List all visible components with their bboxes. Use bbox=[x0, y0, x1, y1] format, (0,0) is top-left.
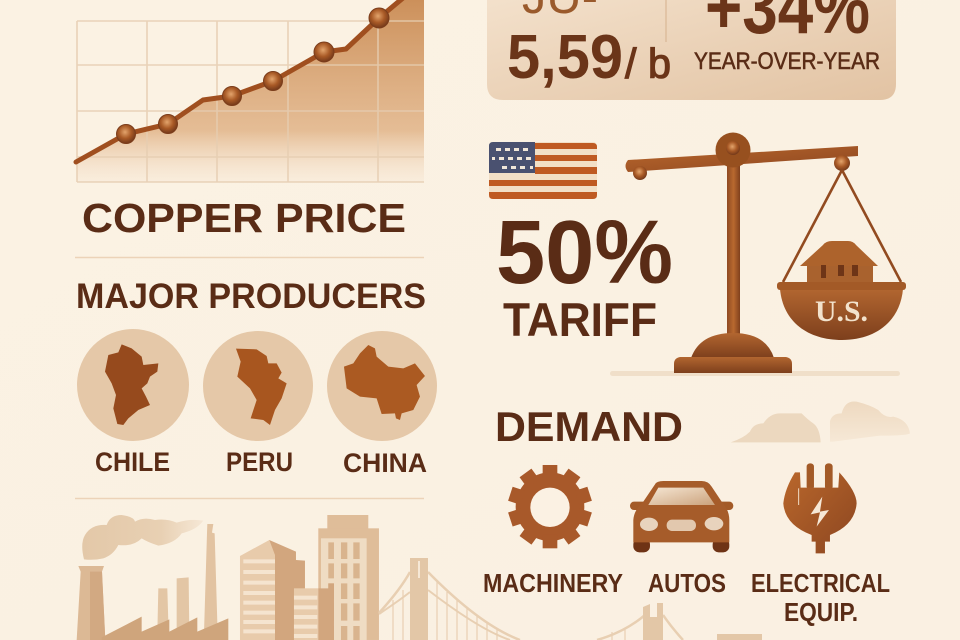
label: U.S.: U.S. bbox=[815, 295, 868, 328]
price unit: / b bbox=[625, 40, 671, 87]
label: China: CHINA bbox=[343, 448, 427, 478]
price value: 5,59 bbox=[507, 23, 623, 92]
distant building bbox=[717, 634, 762, 640]
icon: car bbox=[630, 481, 733, 552]
price line bbox=[76, 0, 403, 162]
beam bbox=[626, 146, 858, 172]
price panel bbox=[487, 0, 896, 100]
producer: Peru bbox=[203, 331, 313, 477]
heading: demand: DEMAND bbox=[495, 403, 683, 450]
copper house bbox=[800, 241, 878, 283]
smoke bbox=[82, 515, 203, 560]
factory bbox=[77, 524, 228, 640]
pan bbox=[780, 289, 903, 340]
office tower bbox=[240, 540, 305, 640]
map: Chile bbox=[105, 344, 158, 425]
skyline: factory and city bbox=[77, 515, 379, 640]
label: machinery: MACHINERY bbox=[483, 568, 623, 598]
clouds bbox=[731, 401, 910, 442]
label: autos: AUTOS bbox=[648, 568, 726, 598]
line chart: copper price bbox=[76, 0, 424, 182]
bridge towers bbox=[410, 558, 663, 640]
label: electrical equipment: ELECTRICAL bbox=[751, 568, 890, 598]
bridge bbox=[379, 558, 683, 640]
chart area fill bbox=[76, 0, 424, 182]
map: China bbox=[344, 345, 425, 420]
stand bbox=[727, 165, 740, 337]
change label: YEAR-OVER-YEAR bbox=[694, 48, 880, 75]
icon: balance scale bbox=[610, 132, 906, 376]
producer: Chile bbox=[77, 329, 189, 477]
data points bbox=[116, 8, 389, 144]
producer: China bbox=[327, 331, 437, 478]
label: electrical equipment bbox=[751, 568, 890, 627]
icon: US flag bbox=[489, 142, 597, 199]
heading: copper price: COPPER PRICE bbox=[82, 195, 406, 241]
label: electrical equipment: EQUIP. bbox=[784, 597, 858, 627]
low building bbox=[294, 583, 334, 640]
label: Peru: PERU bbox=[226, 447, 293, 477]
ground shadow bbox=[610, 371, 900, 376]
pan strings bbox=[783, 170, 901, 282]
icon: electric plug bbox=[783, 463, 857, 553]
tall building bbox=[318, 515, 379, 640]
tariff label: TARIFF bbox=[503, 293, 657, 346]
icon: gear bbox=[508, 465, 592, 548]
heading: major producers: MAJOR PRODUCERS bbox=[76, 277, 426, 316]
tariff figure: 50% bbox=[496, 203, 673, 303]
label: Chile: CHILE bbox=[95, 447, 170, 477]
map: Peru bbox=[236, 349, 287, 425]
